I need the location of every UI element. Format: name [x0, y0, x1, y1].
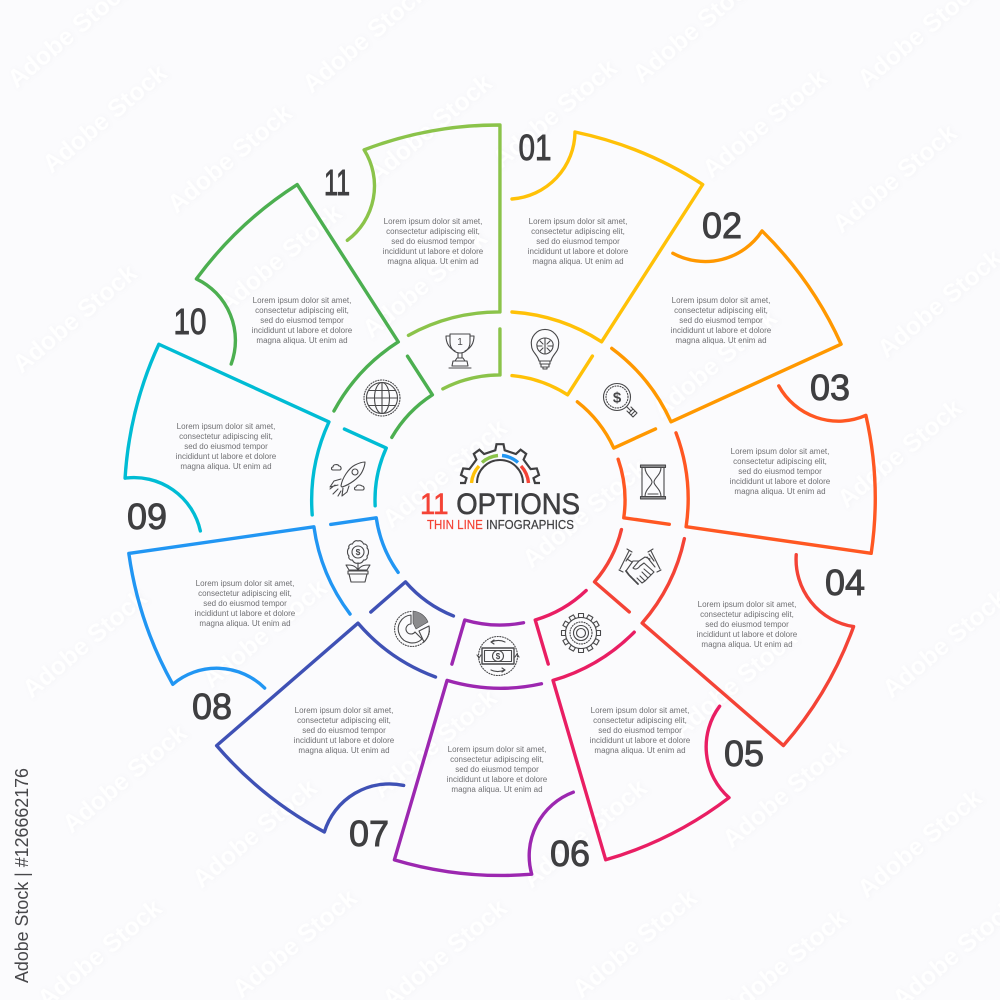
text: Adobe Stock: [377, 414, 512, 534]
number 11: 11: [324, 162, 350, 203]
text block 09: consectetur adipiscing elit,: [179, 432, 273, 441]
text: Adobe Stock: [197, 574, 332, 694]
text block 09: sed do eiusmod tempor: [184, 442, 268, 451]
icon cell: segment 08: [331, 499, 413, 585]
text block 06: Lorem ipsum dolor sit amet,: [448, 745, 546, 754]
text block 07: consectetur adipiscing elit,: [297, 716, 391, 725]
blue arc: [502, 456, 518, 462]
panel: segment 08: [89, 450, 413, 732]
outline: segment 04: [628, 534, 863, 753]
outline: segment 10: [170, 163, 440, 423]
text block 07: magna aliqua. Ut enim ad: [298, 746, 390, 755]
text block 06: consectetur adipiscing elit,: [450, 755, 544, 764]
number 06: 06: [550, 833, 590, 874]
icon cell: segment 05: [519, 578, 601, 664]
text: Adobe Stock: [162, 99, 297, 219]
icon: rocket with clouds: [330, 462, 365, 496]
number 05: 05: [724, 733, 764, 774]
icon: money cycle: $: [496, 652, 501, 661]
icon: gear: [562, 614, 600, 652]
text: Adobe Stock: [17, 584, 152, 704]
text: Adobe Stock: [717, 734, 852, 854]
subtitle: THIN LINE INFOGRAPHICS: [427, 518, 574, 532]
text: Adobe Stock: [697, 64, 832, 184]
text block 08: sed do eiusmod tempor: [203, 599, 287, 608]
text block 07: Lorem ipsum dolor sit amet,: [295, 706, 393, 715]
text block 03: magna aliqua. Ut enim ad: [734, 487, 826, 496]
icon: money cycle: [477, 636, 519, 676]
outline: segment 03: [649, 358, 919, 619]
panel: segment 03: [601, 358, 919, 619]
number 04: 04: [825, 562, 865, 603]
icon: trophy: 1: [457, 337, 463, 348]
text block 06: magna aliqua. Ut enim ad: [451, 785, 543, 794]
number 10: 10: [174, 301, 206, 342]
text block 11: sed do eiusmod tempor: [391, 237, 475, 246]
text block 01: incididunt ut labore et dolore: [528, 247, 629, 256]
text block 04: magna aliqua. Ut enim ad: [701, 640, 793, 649]
text: Adobe Stock: [212, 199, 347, 319]
text block 03: Lorem ipsum dolor sit amet,: [731, 447, 829, 456]
panel: segment 01: [512, 127, 703, 395]
panel: segment 02: [567, 197, 869, 477]
text block 02: sed do eiusmod tempor: [679, 316, 763, 325]
text block 08: magna aliqua. Ut enim ad: [199, 619, 291, 628]
text: Adobe Stock: [827, 119, 962, 239]
text block 02: magna aliqua. Ut enim ad: [675, 336, 767, 345]
text block 08: incididunt ut labore et dolore: [195, 609, 296, 618]
text block 05: sed do eiusmod tempor: [598, 726, 682, 735]
icon cell: segment 04: [591, 527, 641, 612]
text: Adobe Stock: [852, 784, 987, 904]
yellow arc: [472, 466, 479, 483]
icon: light bulb with brain: [531, 329, 559, 369]
text block 09: incididunt ut labore et dolore: [176, 452, 277, 461]
text: Adobe Stock: [7, 259, 142, 379]
icon cell: segment 03: [601, 451, 669, 540]
text block 10: incididunt ut labore et dolore: [252, 326, 353, 335]
icon: magnifier with dollar: $: [613, 390, 622, 406]
icon cell: segment 09: [344, 424, 394, 509]
icon: money flower in pot: [346, 541, 370, 582]
text block 03: sed do eiusmod tempor: [738, 467, 822, 476]
title: 11 OPTIONS: [420, 488, 580, 521]
text block 11: magna aliqua. Ut enim ad: [387, 257, 479, 266]
outline: segment 05: [487, 613, 770, 894]
text block 01: Lorem ipsum dolor sit amet,: [529, 217, 627, 226]
outline: segment 07: [202, 595, 444, 850]
text block 07: incididunt ut labore et dolore: [294, 736, 395, 745]
icon: handshake: [619, 549, 661, 584]
green arc: [482, 456, 498, 462]
red arc: [521, 466, 528, 483]
text: Adobe Stock: [362, 69, 497, 189]
gear outline: [460, 444, 540, 483]
number 02: 02: [702, 205, 742, 246]
text block 05: Lorem ipsum dolor sit amet,: [591, 706, 689, 715]
text block 06: incididunt ut labore et dolore: [447, 775, 548, 784]
panel: segment 05: [487, 578, 770, 894]
text block 11: Lorem ipsum dolor sit amet,: [384, 217, 482, 226]
text block 02: consectetur adipiscing elit,: [674, 306, 768, 315]
text block 04: sed do eiusmod tempor: [705, 620, 789, 629]
text: Adobe Stock: [667, 624, 802, 744]
text: Adobe Stock: [357, 224, 492, 344]
text block 02: Lorem ipsum dolor sit amet,: [672, 296, 770, 305]
text block 01: sed do eiusmod tempor: [536, 237, 620, 246]
center logo: gear with coloured arc: [460, 444, 540, 483]
text: Adobe Stock: [487, 54, 622, 174]
text: Adobe Stock: [647, 304, 782, 424]
icon: pie chart: [395, 611, 430, 646]
text: Adobe Stock: [187, 774, 322, 894]
text block 03: consectetur adipiscing elit,: [733, 457, 827, 466]
text: Adobe Stock: [57, 719, 192, 839]
icon: hourglass: [640, 465, 666, 499]
number 09: 09: [127, 496, 167, 537]
text block 11: incididunt ut labore et dolore: [383, 247, 484, 256]
icon: trophy: [446, 334, 474, 368]
text: Adobe Stock: [517, 774, 652, 894]
text block 10: magna aliqua. Ut enim ad: [256, 336, 348, 345]
text: Adobe Stock: [832, 394, 967, 514]
outline: segment 06: [350, 655, 592, 910]
text block 09: Lorem ipsum dolor sit amet,: [177, 422, 275, 431]
panel: segment 06: [350, 604, 592, 910]
icon: globe: [364, 380, 400, 416]
text block 08: consectetur adipiscing elit,: [198, 589, 292, 598]
text: Adobe Stock: [37, 59, 172, 179]
number 03: 03: [810, 367, 850, 408]
outline: segment 11: [311, 81, 585, 360]
text block 11: consectetur adipiscing elit,: [386, 227, 480, 236]
panel: segment 11: [311, 81, 585, 405]
text block 04: Lorem ipsum dolor sit amet,: [698, 600, 796, 609]
text: Adobe Stock: [367, 684, 502, 804]
icon cell: segment 10: [374, 356, 443, 445]
stock id caption: Adobe Stock | #126662176: [11, 768, 32, 983]
icon cell: segment 11: [432, 329, 521, 405]
text block 05: consectetur adipiscing elit,: [593, 716, 687, 725]
outline: segment 09: [107, 322, 342, 540]
text block 05: incididunt ut labore et dolore: [590, 736, 691, 745]
text block 06: sed do eiusmod tempor: [455, 765, 539, 774]
number 01: 01: [518, 127, 552, 168]
text block 10: consectetur adipiscing elit,: [255, 306, 349, 315]
text block 05: magna aliqua. Ut enim ad: [594, 746, 686, 755]
text block 02: incididunt ut labore et dolore: [671, 326, 772, 335]
text block 01: magna aliqua. Ut enim ad: [532, 257, 624, 266]
text block 10: sed do eiusmod tempor: [260, 316, 344, 325]
text: Adobe Stock: [517, 454, 652, 574]
panel: segment 07: [202, 575, 459, 854]
text block 04: incididunt ut labore et dolore: [697, 630, 798, 639]
icon: magnifier with dollar: [604, 384, 637, 417]
icon cell: segment 01: [512, 356, 592, 395]
outline: segment 02: [596, 197, 869, 477]
text block 07: sed do eiusmod tempor: [302, 726, 386, 735]
icon cell: segment 06: [441, 604, 529, 664]
icon cell: segment 02: [567, 385, 656, 461]
panel: segment 09: [107, 322, 394, 540]
icon: money flower in pot: $: [356, 547, 361, 557]
outline: segment 01: [512, 132, 703, 342]
inner arc: [477, 460, 523, 483]
text block 01: consectetur adipiscing elit,: [531, 227, 625, 236]
panel: segment 04: [591, 527, 865, 753]
number 08: 08: [192, 686, 232, 727]
number 07: 07: [349, 813, 389, 854]
text block 08: Lorem ipsum dolor sit amet,: [196, 579, 294, 588]
text block 04: consectetur adipiscing elit,: [700, 610, 794, 619]
outline: segment 08: [89, 450, 373, 732]
text block 10: Lorem ipsum dolor sit amet,: [253, 296, 351, 305]
panel: segment 10: [170, 163, 443, 445]
icon cell: segment 07: [371, 575, 459, 635]
text block 03: incididunt ut labore et dolore: [730, 477, 831, 486]
text block 09: magna aliqua. Ut enim ad: [180, 462, 272, 471]
